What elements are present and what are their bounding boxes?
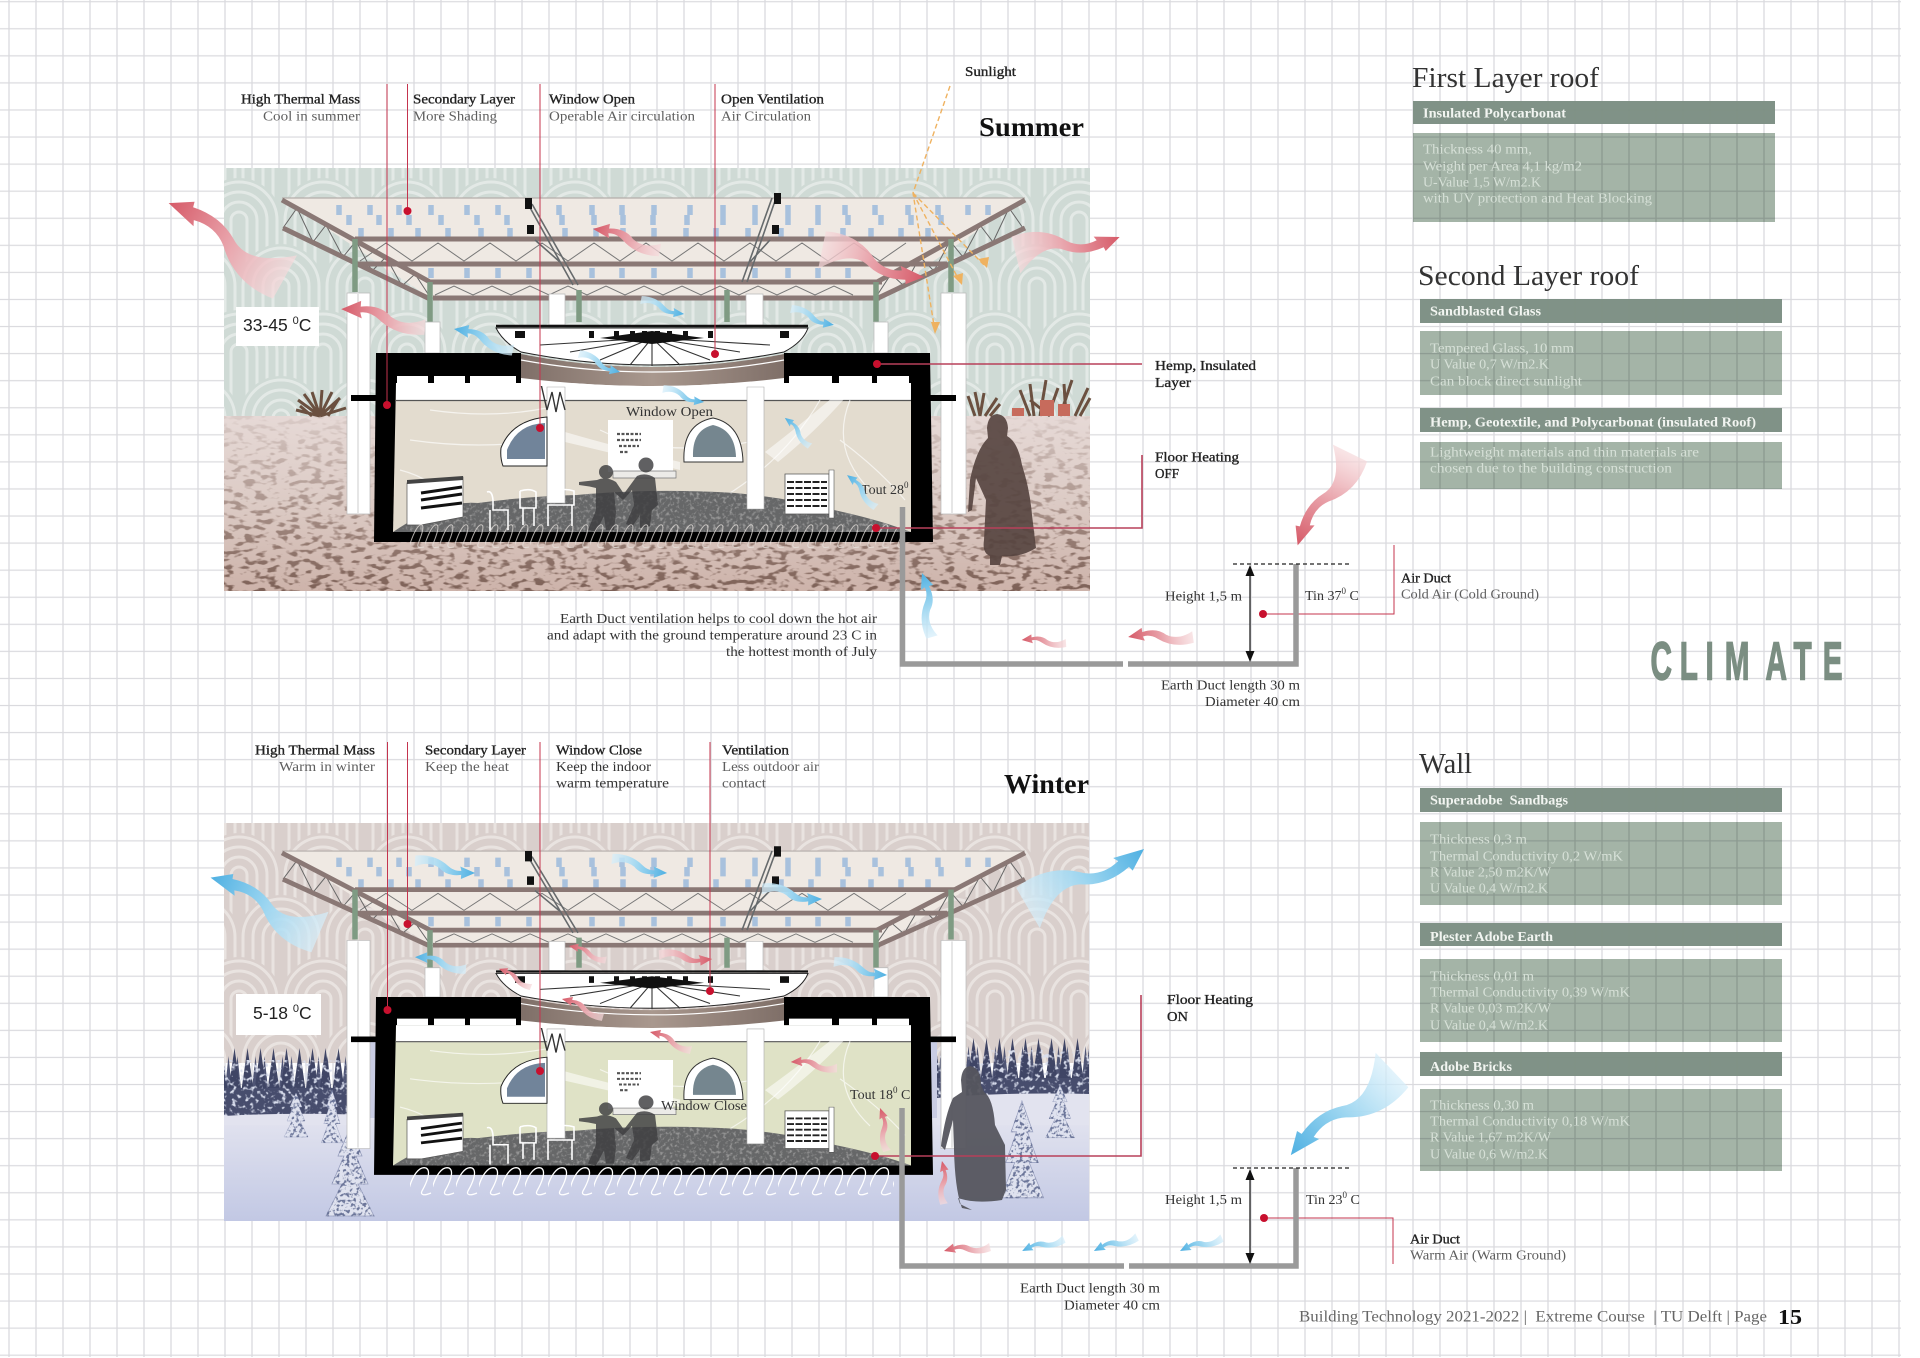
box text adobe bricks: Thickness 0,30 m bbox=[1430, 1098, 1534, 1114]
box text hemp geotextile bbox=[1430, 446, 1699, 476]
box text plester: Thickness 0,01 m bbox=[1430, 970, 1534, 984]
label air duct cold air: Air Duct bbox=[1401, 572, 1451, 586]
label floor heating off: OFF bbox=[1155, 467, 1179, 482]
arrow: blue under ceiling bbox=[661, 385, 706, 407]
winter callout leader lines bbox=[384, 742, 1393, 1264]
label ventilation: Ventilation bbox=[722, 744, 789, 758]
in-room label tout winter: C bbox=[897, 1088, 910, 1103]
panel: wall bbox=[1419, 749, 1782, 1171]
label warm in winter: Warm in winter bbox=[279, 760, 375, 775]
label contact: contact bbox=[722, 776, 766, 792]
box plester bbox=[1420, 959, 1782, 1042]
arrow: blue room upper bbox=[779, 415, 816, 449]
box text superadobe: R Value 2,50 m2K/W bbox=[1430, 866, 1552, 880]
label earth duct length summer: Earth Duct length 30 m bbox=[1161, 678, 1300, 694]
arrow: blue under roof right bbox=[789, 305, 836, 330]
label floor heating off: Floor Heating bbox=[1155, 450, 1239, 466]
panel: summer section bbox=[224, 168, 1090, 591]
arrow: pink in duct 1 bbox=[1021, 632, 1066, 650]
label air duct cold air bbox=[1401, 572, 1539, 602]
label earth duct length winter: Earth Duct length 30 m bbox=[1020, 1282, 1160, 1296]
heading wall: Wall bbox=[1419, 749, 1472, 780]
arrow: winter pink rising in room bbox=[870, 1107, 897, 1152]
bar title: Superadobe Sandbags bbox=[1430, 794, 1569, 808]
bar title: Hemp, Geotextile, and Polycarbonat (insulated Roof) bbox=[1430, 416, 1756, 430]
box text plester: U Value 0,4 W/m2.K bbox=[1430, 1018, 1548, 1034]
arrow: winter pink 3 bbox=[496, 965, 534, 990]
panel: winter section bbox=[224, 823, 1089, 1221]
box text sandblasted glass bbox=[1430, 342, 1582, 390]
earth duct summer bbox=[902, 507, 1296, 664]
label tin winter: Tin 23 bbox=[1306, 1193, 1342, 1208]
box text superadobe: Thickness 0,3 m bbox=[1430, 832, 1527, 848]
bar adobe bricks bbox=[1420, 1052, 1782, 1076]
temperature box winter: 0 bbox=[293, 1003, 299, 1015]
in-room label tout: 0 bbox=[904, 480, 909, 490]
box text superadobe: U Value 0,4 W/m2.K bbox=[1430, 882, 1548, 896]
bar hemp geotextile bbox=[1420, 408, 1782, 432]
label cool in summer: Cool in summer bbox=[263, 110, 360, 124]
heading winter: Winter bbox=[1004, 769, 1089, 799]
label air duct warm air: Warm Air (Warm Ground) bbox=[1410, 1248, 1566, 1264]
box text first layer bbox=[1423, 142, 1652, 206]
label high thermal mass: High Thermal Mass bbox=[241, 92, 360, 108]
arrow: roof pink right bbox=[818, 231, 929, 289]
label air circulation: Air Circulation bbox=[721, 110, 811, 124]
label earth duct length summer: Diameter 40 cm bbox=[1205, 695, 1300, 710]
box text adobe bricks bbox=[1430, 1098, 1630, 1162]
temperature box summer: 33-45 bbox=[243, 315, 288, 335]
temperature box winter bbox=[236, 994, 321, 1035]
box adobe bricks bbox=[1420, 1089, 1782, 1171]
floor heating coils summer bbox=[410, 523, 905, 549]
height dimension winter bbox=[1233, 1168, 1350, 1264]
text earth duct ventilation: the hottest month of July bbox=[726, 645, 877, 660]
arrow: blue duct riser summer bbox=[907, 571, 947, 639]
floor heating coils winter bbox=[410, 1166, 894, 1196]
height dimension summer bbox=[1233, 564, 1350, 662]
sunlight rays bbox=[913, 86, 989, 334]
in-room label tout: Tout 28 bbox=[861, 483, 904, 498]
arrow: winter pink 1 bbox=[567, 942, 608, 964]
label air duct warm air bbox=[1410, 1232, 1566, 1264]
arrow: blue in dome bbox=[576, 350, 623, 377]
winter top labels bbox=[255, 744, 819, 792]
arrow: cold air intake winter bbox=[1280, 1053, 1409, 1179]
in-room label window close: Window Close bbox=[661, 1099, 747, 1114]
box text plester bbox=[1430, 970, 1630, 1034]
arrow: winter pink 2 bbox=[659, 947, 713, 968]
text earth duct ventilation: and adapt with the ground temperature around 23 C in bbox=[547, 628, 877, 644]
label tin winter: 0 bbox=[1342, 1190, 1347, 1200]
summer building section bbox=[282, 193, 1025, 542]
label more shading: More Shading bbox=[413, 110, 497, 124]
arrow: winter duct blue 1 bbox=[1020, 1229, 1066, 1260]
bar title: Adobe Bricks bbox=[1430, 1060, 1513, 1075]
bar sandblasted glass bbox=[1420, 299, 1782, 323]
label secondary layer winter: Secondary Layer bbox=[425, 744, 526, 758]
arrow: winter cold out left bbox=[199, 864, 329, 953]
box text superadobe: Thermal Conductivity 0,2 W/mK bbox=[1430, 850, 1623, 864]
box hemp geotextile bbox=[1420, 442, 1782, 489]
box text plester: Thermal Conductivity 0,39 W/mK bbox=[1430, 986, 1630, 1000]
temperature box summer bbox=[236, 307, 319, 346]
label high thermal mass winter: High Thermal Mass bbox=[255, 744, 375, 758]
label window open: Window Open bbox=[549, 92, 635, 108]
temperature box winter: C bbox=[299, 1003, 312, 1023]
label tin summer: C bbox=[1346, 589, 1359, 604]
label secondary layer: Secondary Layer bbox=[413, 92, 515, 108]
arrow: winter pink rising outside bbox=[932, 1160, 954, 1205]
label height summer: Height 1,5 m bbox=[1165, 590, 1242, 604]
box text sandblasted glass: U Value 0,7 W/m2.K bbox=[1430, 358, 1549, 372]
label floor heating off bbox=[1155, 450, 1239, 482]
arrow: winter cold out right bbox=[1016, 821, 1152, 928]
arrow: blue under roof left bbox=[639, 296, 686, 319]
arrow: winter pink 5 bbox=[647, 1027, 694, 1054]
arrow: winter roof blue left bbox=[414, 855, 476, 880]
label earth duct length winter bbox=[1020, 1282, 1160, 1314]
earth duct winter bbox=[902, 1108, 1296, 1266]
label keep the heat: Keep the heat bbox=[425, 760, 509, 775]
arrow: winter duct blue 3 bbox=[1178, 1228, 1224, 1260]
box text superadobe bbox=[1430, 832, 1623, 896]
winter building section bbox=[282, 846, 1025, 1175]
summer callout leader lines bbox=[383, 84, 1394, 618]
box text plester: R Value 0,03 m2K/W bbox=[1430, 1002, 1552, 1016]
arrow: pink left column bbox=[340, 299, 427, 335]
box text hemp geotextile: chosen due to the building construction bbox=[1430, 462, 1672, 476]
box superadobe bbox=[1420, 822, 1782, 905]
label open ventilation: Open Ventilation bbox=[721, 92, 824, 108]
footer bbox=[1299, 1305, 1802, 1329]
text earth duct ventilation: Earth Duct ventilation helps to cool down the hot air bbox=[560, 612, 877, 627]
arrow: blue room lower bbox=[841, 471, 883, 510]
box text sandblasted glass: Can block direct sunlight bbox=[1430, 374, 1582, 390]
summer top labels bbox=[241, 92, 824, 124]
woman silhouette winter bbox=[941, 1066, 1006, 1210]
box text adobe bricks: U Value 0,6 W/m2.K bbox=[1430, 1148, 1548, 1162]
in-room label tout winter: Tout 18 bbox=[850, 1088, 893, 1103]
bar title: Insulated Polycarbonat bbox=[1423, 106, 1566, 122]
summer backdrop: patterned wall and sand bbox=[224, 168, 1090, 591]
label warm temperature: warm temperature bbox=[556, 776, 669, 792]
label height winter: Height 1,5 m bbox=[1165, 1193, 1242, 1208]
arrow: winter duct blue 2 bbox=[1092, 1227, 1139, 1261]
box text adobe bricks: R Value 1,67 m2K/W bbox=[1430, 1130, 1552, 1146]
label air duct cold air: Cold Air (Cold Ground) bbox=[1401, 588, 1539, 602]
label tin summer: Tin 37 bbox=[1305, 589, 1341, 604]
label tin winter: C bbox=[1347, 1193, 1360, 1208]
label tin summer: 0 bbox=[1341, 586, 1346, 596]
arrow: winter roof blue centre bbox=[610, 853, 669, 879]
panel: first layer roof bbox=[1412, 63, 1775, 222]
title climate: CLIMATE bbox=[1651, 632, 1843, 692]
temperature box summer: C bbox=[299, 315, 311, 335]
label sunlight: Sunlight bbox=[965, 65, 1016, 80]
arrow: blue to skylight bbox=[451, 322, 516, 356]
in-room label window open: Window Open bbox=[626, 405, 713, 420]
bar title: Sandblasted Glass bbox=[1430, 304, 1542, 320]
label hemp insulated layer bbox=[1155, 359, 1256, 391]
arrow: pink in duct 2 bbox=[1127, 621, 1194, 652]
bar superadobe bbox=[1420, 788, 1782, 812]
arrow: roof pink centre bbox=[590, 221, 663, 257]
arrow: winter pink 4 bbox=[559, 994, 606, 1021]
bar title: Plester Adobe Earth bbox=[1430, 930, 1553, 945]
label air duct warm air: Air Duct bbox=[1410, 1232, 1460, 1248]
arrow: winter duct pink bbox=[943, 1236, 991, 1262]
panel: second layer roof bbox=[1418, 261, 1782, 489]
winter backdrop: patterned wall, forest and snow bbox=[224, 823, 1089, 1221]
box text sandblasted glass: Tempered Glass, 10 mm bbox=[1430, 342, 1574, 356]
label floor heating on: Floor Heating bbox=[1167, 993, 1253, 1008]
arrow: hot air out right bbox=[1011, 212, 1123, 273]
bar plester adobe earth bbox=[1420, 923, 1782, 946]
temperature box summer: 0 bbox=[293, 315, 299, 327]
label hemp insulated layer: Layer bbox=[1155, 376, 1191, 391]
label floor heating on: ON bbox=[1167, 1010, 1188, 1025]
in-room label tout winter: 0 bbox=[893, 1085, 898, 1095]
label less outdoor air: Less outdoor air bbox=[722, 760, 819, 775]
box first layer bbox=[1413, 133, 1775, 222]
heading summer: Summer bbox=[979, 112, 1084, 142]
label earth duct length summer bbox=[1161, 678, 1300, 710]
temperature box winter: 5-18 bbox=[253, 1003, 288, 1023]
label keep the indoor: Keep the indoor bbox=[556, 760, 651, 775]
arrow: hot air intake summer bbox=[1286, 445, 1368, 557]
box sandblasted glass bbox=[1420, 331, 1782, 395]
arrow: winter pink 6 bbox=[791, 1056, 837, 1073]
page number: 15 bbox=[1778, 1305, 1802, 1329]
text earth duct ventilation bbox=[547, 612, 877, 660]
arrow: winter blue lower left bbox=[414, 951, 467, 974]
label floor heating on bbox=[1167, 993, 1253, 1025]
heading first layer roof: First Layer roof bbox=[1412, 63, 1600, 94]
box text adobe bricks: Thermal Conductivity 0,18 W/mK bbox=[1430, 1114, 1630, 1130]
box text first layer: U-Value 1,5 W/m2.K bbox=[1423, 176, 1541, 190]
label operable air circulation: Operable Air circulation bbox=[549, 110, 695, 124]
box text hemp geotextile: Lightweight materials and thin materials are bbox=[1430, 446, 1699, 460]
arrow: winter blue lower right bbox=[833, 957, 888, 981]
label earth duct length winter: Diameter 40 cm bbox=[1064, 1298, 1160, 1314]
box text first layer: with UV protection and Heat Blocking bbox=[1423, 192, 1652, 206]
footer text: Building Technology 2021-2022 | Extreme Course | TU Delft | Page bbox=[1299, 1308, 1767, 1326]
arrow: winter roof blue right bbox=[762, 883, 822, 906]
box text first layer: Thickness 40 mm, bbox=[1423, 142, 1532, 158]
label hemp insulated layer: Hemp, Insulated bbox=[1155, 359, 1256, 374]
label window close: Window Close bbox=[556, 744, 642, 758]
box text first layer: Weight per Area 4,1 kg/m2 bbox=[1423, 160, 1582, 174]
bar insulated polycarbonat bbox=[1413, 101, 1775, 124]
heading second layer roof: Second Layer roof bbox=[1418, 261, 1640, 292]
arrow: hot air out left bbox=[152, 189, 297, 299]
woman silhouette summer bbox=[968, 414, 1036, 565]
